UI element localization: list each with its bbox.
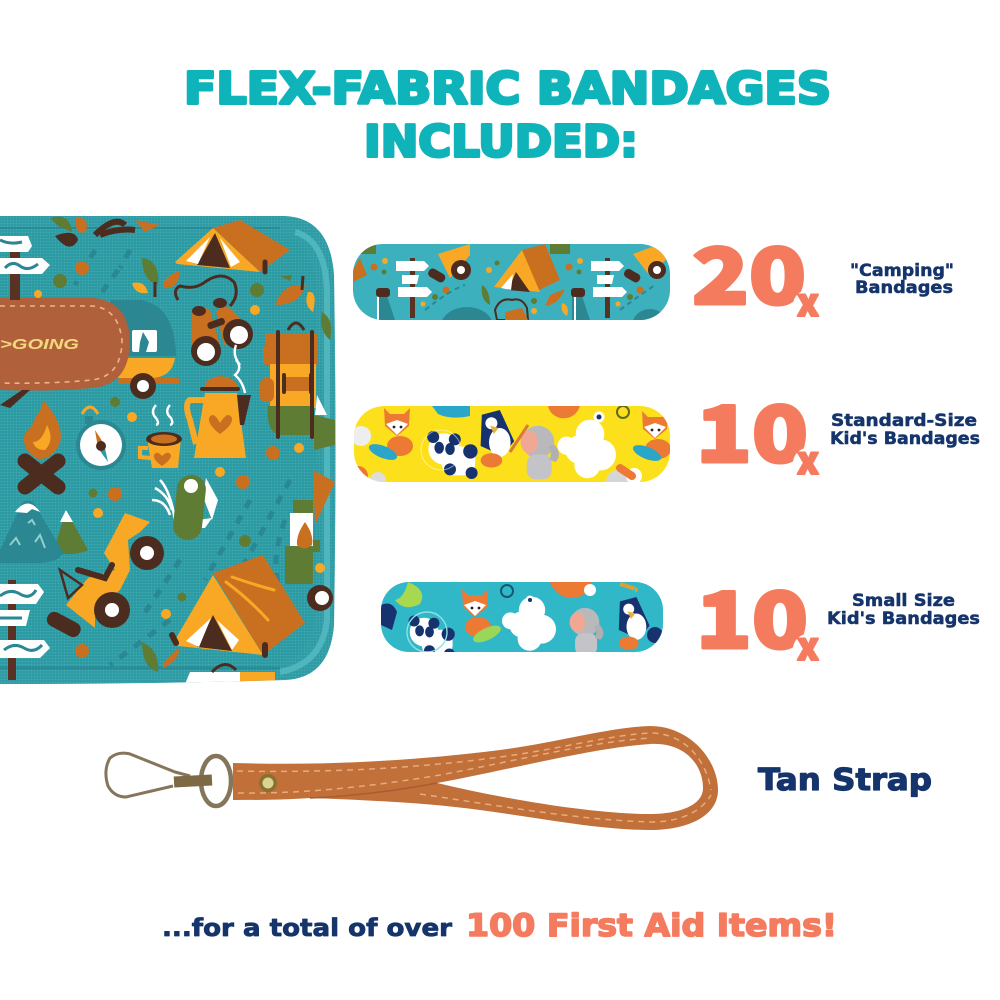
- count 10 first: 10: [696, 373, 808, 485]
- count x halo second: [793, 448, 823, 478]
- label: camping: [850, 261, 954, 297]
- icon: backpack: [260, 323, 318, 437]
- wrist strap: [106, 726, 718, 830]
- faint dashes: [75, 250, 290, 665]
- bandage: yellow kids: [354, 406, 670, 482]
- count 10 second: 10: [696, 559, 808, 671]
- pouch product photo: [0, 216, 336, 686]
- icon: bottom tent: [172, 555, 305, 655]
- title: [184, 64, 831, 168]
- counts: [692, 215, 823, 671]
- title: INCLUDED:: [364, 116, 638, 168]
- icon: rivet: [259, 774, 277, 792]
- label: small: Small Size: [852, 591, 955, 610]
- icon: coffee pot: [187, 345, 251, 458]
- count x halo: [793, 290, 823, 320]
- icon: campfire: [24, 400, 61, 487]
- label: standard: Kid's Bandages: [830, 429, 980, 448]
- label: standard: [830, 411, 980, 448]
- title: FLEX-FABRIC BANDAGES: [184, 64, 831, 114]
- labels: [827, 261, 980, 628]
- icon: compass: [76, 407, 126, 470]
- icon: swivel clasp: [106, 753, 231, 806]
- dots: [34, 261, 325, 658]
- icon: top tent: [175, 220, 290, 272]
- icon: leather patch: [0, 298, 130, 391]
- icon: top border leaves: [50, 217, 180, 297]
- label: tan strap: Tan Strap: [758, 763, 932, 798]
- icon: orange pennant right: [313, 395, 335, 525]
- footer total: [162, 908, 837, 944]
- label: camping: "Camping": [850, 261, 954, 280]
- label: small: Kid's Bandages: [827, 609, 980, 628]
- count x halo third: [793, 634, 823, 664]
- count x: x: [797, 272, 819, 327]
- icon: leaves right: [275, 275, 331, 340]
- icon: binoculars: [175, 276, 253, 366]
- footer lead-in: ...for a total of over: [162, 914, 452, 942]
- icon: mountains: [0, 500, 88, 563]
- icon: trailer: [110, 300, 180, 399]
- count x second: x: [797, 430, 819, 485]
- icon: top signpost: [0, 236, 50, 300]
- label: small: [827, 591, 980, 628]
- icon: flask: [285, 500, 320, 584]
- bandage: small teal kids: [381, 582, 663, 660]
- label: camping: Bandages: [855, 278, 953, 297]
- icon: pocket knife: [152, 474, 218, 541]
- icon: branch stub: [0, 390, 30, 408]
- icon: leather patch: >GOING: [0, 336, 79, 353]
- bandage: camping: [353, 244, 670, 320]
- count x third: x: [797, 616, 819, 671]
- icon: orange tracked vehicle: [44, 513, 164, 640]
- label: standard: Standard-Size: [831, 411, 977, 430]
- icon: mug: [140, 405, 182, 468]
- icon: right wheel: [307, 585, 333, 611]
- footer highlight: 100 First Aid Items!: [466, 908, 837, 944]
- count 20: 20: [692, 215, 806, 327]
- icon: bottom signpost: [0, 580, 50, 680]
- icon: bottom leaves: [142, 642, 275, 684]
